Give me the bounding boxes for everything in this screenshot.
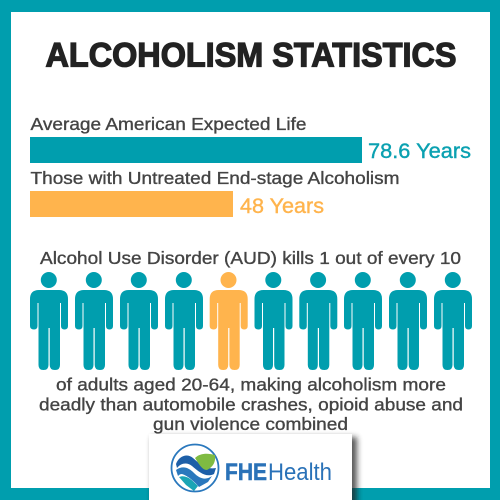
logo card	[149, 434, 357, 500]
label: average life: Average American Expected Life	[30, 114, 306, 134]
bar: average life	[30, 137, 362, 163]
chart: life expectancy	[30, 114, 471, 218]
logo mark	[172, 444, 218, 492]
stat description	[39, 374, 463, 434]
logo wordmark: Health	[268, 459, 332, 486]
logo wordmark	[225, 459, 332, 486]
person 5 highlighted	[210, 272, 248, 370]
person 2	[75, 272, 113, 370]
person 1	[30, 272, 68, 370]
stat description: deadly than automobile crashes, opioid abuse and	[39, 394, 463, 414]
stat description: gun violence combined	[153, 414, 348, 434]
logo wordmark: FHE	[225, 459, 267, 486]
value: average life: 78.6 Years	[368, 140, 471, 163]
person 8	[344, 272, 382, 370]
person 10	[434, 272, 472, 370]
stat heading: Alcohol Use Disorder (AUD) kills 1 out of every 10	[40, 248, 461, 268]
person 6	[254, 272, 292, 370]
person 7	[299, 272, 337, 370]
person 9	[389, 272, 427, 370]
person 4	[165, 272, 203, 370]
pictogram: 1 in 10 people	[30, 272, 472, 370]
value: untreated alcoholism: 48 Years	[240, 195, 324, 218]
person 3	[120, 272, 158, 370]
stat description: of adults aged 20-64, making alcoholism more	[56, 374, 446, 394]
title: ALCOHOLISM STATISTICS	[46, 36, 456, 74]
bar: untreated alcoholism	[30, 191, 233, 217]
label: untreated alcoholism: Those with Untreated End-stage Alcoholism	[30, 168, 400, 188]
